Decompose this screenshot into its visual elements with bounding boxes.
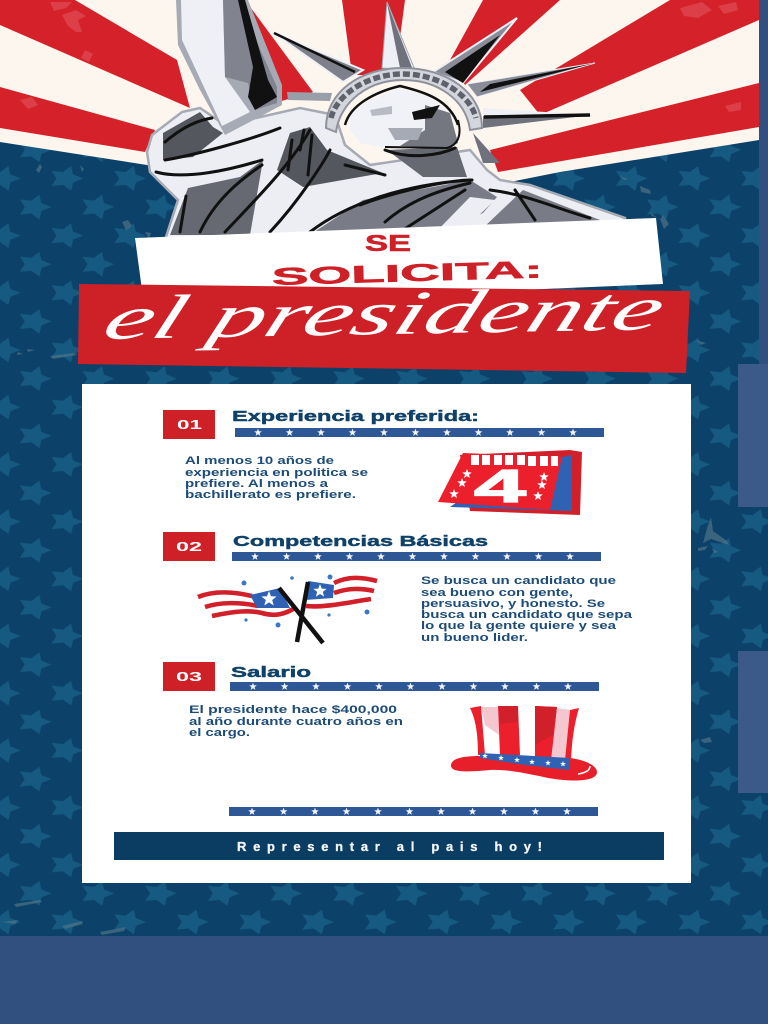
section 01: Al menos 10 años de bbox=[185, 455, 334, 467]
heading: SE SOLICITA: SE bbox=[365, 230, 411, 256]
section 02: 02 bbox=[176, 539, 202, 554]
crown band bbox=[326, 68, 482, 132]
section 01: bachillerato es prefiere. bbox=[185, 489, 356, 501]
section 03: Salario bbox=[231, 664, 311, 681]
section 01: prefiere. Al menos a bbox=[185, 478, 329, 490]
section 03: El presidente hace $400,000 bbox=[189, 704, 397, 716]
section 01: experiencia en politica se bbox=[185, 467, 368, 479]
sunburst rays bbox=[0, 0, 759, 200]
main white panel bbox=[82, 384, 691, 883]
section 03: el cargo. bbox=[189, 727, 250, 739]
icon: Uncle Sam hat bbox=[451, 706, 597, 780]
section 03: al año durante cuatro años en bbox=[189, 716, 403, 728]
section 02: sea bueno con gente, bbox=[421, 587, 573, 599]
heading: SE SOLICITA bbox=[271, 230, 543, 291]
white banner bbox=[135, 218, 663, 295]
raised arm bbox=[176, 0, 282, 135]
face bbox=[345, 86, 460, 148]
illustration: Statue of Liberty bbox=[147, 0, 625, 240]
icon: calendar bbox=[438, 450, 582, 515]
icon: crossed flags bbox=[198, 574, 377, 643]
section 01: Experiencia preferida: bbox=[232, 408, 479, 425]
drapery bbox=[156, 112, 600, 238]
red banner with script title: el presidente bbox=[95, 274, 675, 353]
icon: calendar: 4 bbox=[474, 460, 527, 512]
section 02: Competencias Básicas bbox=[233, 533, 488, 550]
section 02: persuasivo, y honesto. Se bbox=[421, 598, 605, 610]
call to action bbox=[114, 832, 664, 860]
body silhouette bbox=[147, 108, 625, 240]
red banner with script title bbox=[78, 274, 690, 373]
crown spikes bbox=[272, 2, 595, 163]
call to action: Representar al pais hoy! bbox=[237, 839, 542, 854]
section 02 bbox=[163, 532, 633, 644]
section 01 bbox=[163, 408, 604, 515]
divider bar bbox=[229, 807, 598, 816]
section 02: busca un candidato que sepa bbox=[421, 609, 633, 621]
heading: SE SOLICITA: SOLICITA: bbox=[271, 256, 543, 291]
section 02: lo que la gente quiere y sea bbox=[421, 620, 617, 632]
section 02: un bueno lider. bbox=[421, 632, 528, 644]
section 03 bbox=[163, 662, 599, 780]
section 01: 01 bbox=[177, 417, 202, 432]
section 02: Se busca un candidato que bbox=[421, 575, 616, 587]
section 03: 03 bbox=[176, 669, 202, 684]
